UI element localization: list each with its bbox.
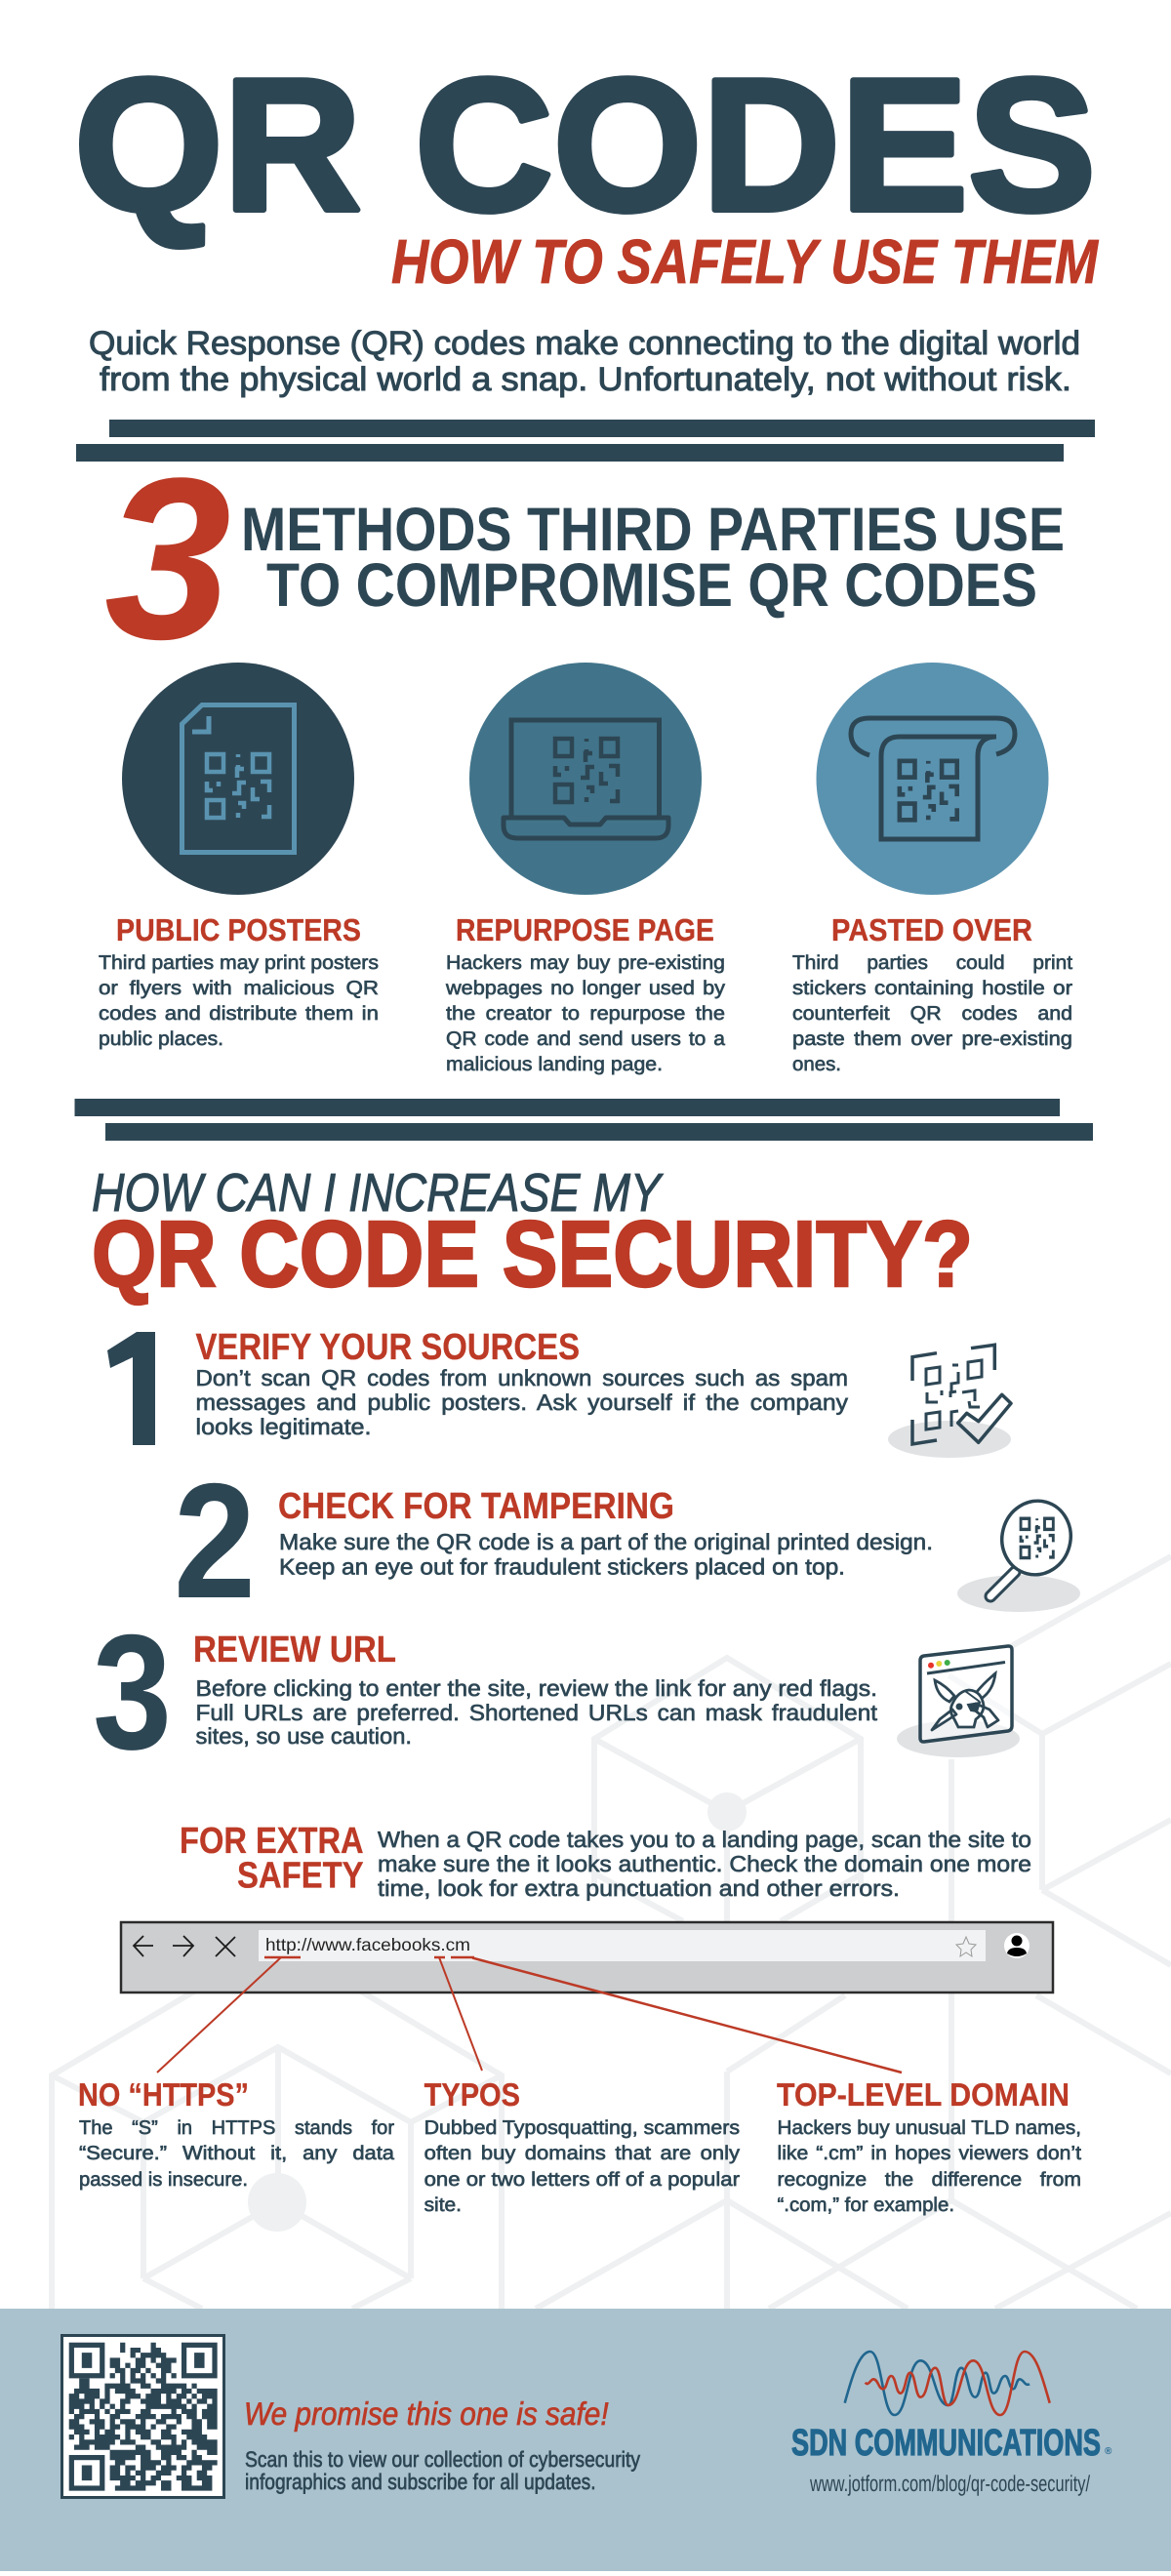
body: Hackers may buy pre-existing [446, 952, 725, 974]
methods heading: METHODS THIRD PARTIES USE [241, 496, 1065, 564]
body: Keep an eye out for fraudulent stickers placed on top. [279, 1553, 845, 1579]
panel: top-level domain [777, 2076, 1081, 2216]
url text: http://www.facebooks.cm [265, 1935, 470, 1954]
heading: CHECK FOR TAMPERING [278, 1486, 674, 1527]
heading: TYPOS [424, 2076, 520, 2113]
panel: typos [424, 2076, 740, 2216]
number 1 [107, 1332, 155, 1445]
tip 3: review URL [93, 1600, 1020, 1784]
body [79, 2117, 395, 2191]
body: ones. [792, 1054, 841, 1075]
tip 1: verify your sources [107, 1327, 1011, 1458]
body [195, 1365, 849, 1439]
body: The “S” in HTTPS stands for [79, 2117, 394, 2139]
body: stickers containing hostile or [792, 978, 1072, 999]
panel: repurpose page [445, 663, 726, 1075]
background hexagon pattern [52, 1556, 1171, 2309]
browser bar illustration [121, 1922, 1053, 1992]
body: recognize the difference from [777, 2169, 1081, 2191]
tip 2: check for tampering [174, 1449, 1080, 1632]
body: make sure the it looks authentic. Check the domain one more [378, 1851, 1031, 1876]
body: Third parties may print posters [99, 952, 379, 974]
body: When a QR code takes you to a landing page, scan the site to [378, 1827, 1031, 1852]
body: counterfeit QR codes and [792, 1003, 1072, 1025]
body [279, 1529, 933, 1579]
body: Before clicking to enter the site, review the link for any red flags. [195, 1675, 877, 1701]
body: time, look for extra punctuation and other errors. [378, 1875, 900, 1901]
heading [180, 1821, 364, 1897]
title: QR CODES [74, 39, 1096, 250]
number 2: 2 [174, 1449, 256, 1632]
body: looks legitimate. [195, 1414, 371, 1439]
heading: FOR EXTRA [180, 1821, 364, 1862]
heading: SAFETY [237, 1856, 364, 1897]
footer scan text [245, 2447, 641, 2494]
registered mark: ® [1105, 2446, 1112, 2457]
intro text [89, 325, 1080, 398]
callout lines [157, 1957, 902, 2073]
body: Dubbed Typosquatting, scammers [424, 2117, 740, 2139]
security heading [92, 1162, 973, 1307]
for extra safety callout [180, 1821, 1031, 1901]
icon: sticker roll [816, 663, 1048, 895]
body: sites, so use caution. [195, 1723, 412, 1749]
footer scan text: Scan this to view our collection of cybersecurity [245, 2447, 641, 2472]
address field [259, 1930, 986, 1961]
security heading: HOW CAN I INCREASE MY [92, 1162, 664, 1223]
icon: forward arrow [173, 1936, 193, 1956]
icon: magnifier [957, 1493, 1080, 1612]
icon: user avatar [1004, 1933, 1030, 1958]
body: Don’t scan QR codes from unknown sources such as spam [195, 1365, 848, 1390]
body: “Secure.” Without it, any data [79, 2143, 395, 2164]
panel: no https [78, 2076, 395, 2191]
methods heading: TO COMPROMISE QR CODES [266, 551, 1037, 620]
heading: REPURPOSE PAGE [456, 912, 714, 947]
footer band [0, 2309, 1171, 2571]
body: malicious landing page. [446, 1054, 663, 1075]
body [792, 952, 1072, 1075]
body: the creator to repurpose the [446, 1003, 725, 1025]
body: Full URLs are preferred. Shortened URLs can mask fraudulent [195, 1700, 878, 1725]
body [777, 2117, 1081, 2216]
body: Hackers buy unusual TLD names, [777, 2117, 1081, 2139]
heading: PUBLIC POSTERS [116, 912, 361, 947]
body [99, 952, 379, 1050]
icon: waves [845, 2352, 1050, 2415]
icon: close [216, 1937, 235, 1956]
body: site. [424, 2194, 462, 2216]
body [445, 952, 726, 1075]
SDN Communications logo [791, 2352, 1112, 2464]
body: or flyers with malicious QR [99, 978, 379, 999]
body: Make sure the QR code is a part of the original printed design. [279, 1529, 933, 1554]
icon: pirate browser window [897, 1646, 1020, 1757]
body: passed is insecure. [79, 2169, 248, 2191]
number 3: 3 [93, 1600, 172, 1784]
footer QR code [62, 2336, 224, 2498]
footer promise text: We promise this one is safe! [244, 2395, 609, 2432]
icon: star [956, 1937, 976, 1956]
heading: PASTED OVER [831, 912, 1032, 947]
body [378, 1827, 1031, 1901]
panel: public posters [99, 663, 379, 1050]
body: Third parties could print [792, 952, 1072, 974]
intro text: Quick Response (QR) codes make connecting to the digital world [89, 325, 1080, 362]
body: QR code and send users to a [446, 1028, 726, 1050]
body: one or two letters off of a popular [424, 2169, 740, 2191]
body [424, 2117, 740, 2216]
body: paste them over pre-existing [792, 1028, 1072, 1050]
body: webpages no longer used by [445, 978, 725, 999]
body: public places. [99, 1028, 223, 1050]
body: like “.cm” in hopes viewers don’t [777, 2143, 1081, 2164]
body [195, 1675, 878, 1749]
heading: NO “HTTPS” [78, 2076, 249, 2113]
icon: poster [122, 663, 354, 895]
body: “.com,” for example. [777, 2194, 954, 2216]
body: codes and distribute them in [99, 1003, 379, 1025]
double divider top [76, 420, 1095, 462]
heading: VERIFY YOUR SOURCES [195, 1327, 580, 1368]
body: messages and public posters. Ask yourself if the company [195, 1389, 849, 1415]
body: often buy domains that are only [424, 2143, 740, 2164]
panel: pasted over [792, 663, 1072, 1075]
double divider middle [74, 1099, 1093, 1141]
big number 3: 3 [104, 430, 231, 688]
icon: back arrow [134, 1936, 153, 1956]
heading: TOP-LEVEL DOMAIN [777, 2076, 1070, 2113]
security heading: QR CODE SECURITY? [92, 1202, 973, 1307]
footer scan text: infographics and subscribe for all updates. [245, 2470, 596, 2494]
intro text: from the physical world a snap. Unfortunately, not without risk. [100, 361, 1071, 398]
heading: REVIEW URL [193, 1630, 396, 1670]
icon: laptop [469, 663, 702, 895]
icon: QR check [888, 1345, 1011, 1458]
methods heading [241, 496, 1065, 620]
